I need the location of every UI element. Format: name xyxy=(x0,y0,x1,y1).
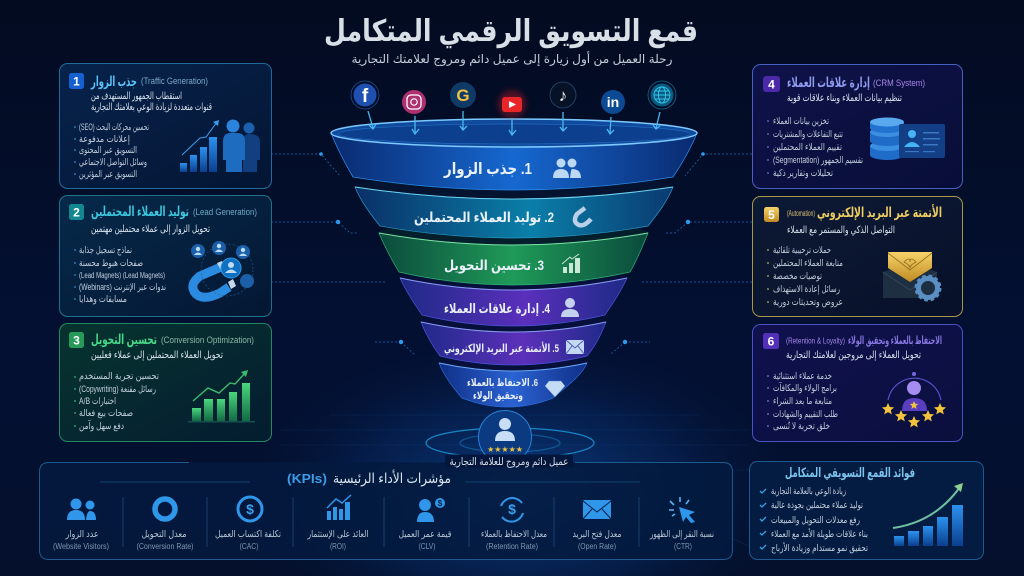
list 6: برامج الولاء والمكافآت xyxy=(773,381,837,394)
kpi: conversion rate xyxy=(136,499,194,551)
icon: diamond xyxy=(545,381,565,397)
icon: globe xyxy=(648,81,676,109)
description 4: تنظيم بيانات العملاء وبناء علاقات قوية xyxy=(787,93,902,104)
list 2: ندوات عبر الإنترنت (Webinars) xyxy=(79,282,166,293)
kpi: customer lifetime value: قيمة عمر العميل xyxy=(398,529,452,540)
label 4: 4. إدارة علاقات العملاء xyxy=(444,301,551,316)
english heading 4: (CRM System) xyxy=(873,78,925,88)
badge caption: عميل دائم ومروج للعلامة التجارية xyxy=(450,456,568,468)
icon: customer with stars xyxy=(882,372,946,427)
kpi: click through rate: نسبة النقر إلى الظهور xyxy=(649,529,714,540)
badge 2: 2 xyxy=(73,206,80,220)
kpi heading: (KPIs) xyxy=(287,471,327,486)
funnel layer 4 xyxy=(400,266,627,326)
list 1: التسويق عبر المؤثرين xyxy=(79,169,137,180)
list 2: نماذج تسجيل جذابة xyxy=(79,245,132,256)
arrows into funnel xyxy=(368,111,660,135)
list 1: التسويق عبر المحتوى xyxy=(79,145,137,156)
heading 5: الأتمتة عبر البريد الإلكتروني xyxy=(817,204,942,220)
kpi: website visitors: عدد الزوار xyxy=(65,529,98,540)
icon: people xyxy=(553,158,581,178)
label 5: 5. الأتمتة عبر البريد الإلكتروني xyxy=(444,341,559,355)
panel: funnel benefits xyxy=(750,462,984,560)
list 5: عروض وتحديثات دورية xyxy=(773,297,843,308)
list 6: متابعة ما بعد الشراء xyxy=(773,396,832,407)
list 2 xyxy=(74,245,166,305)
list 3 xyxy=(74,371,159,432)
kpi: customer lifetime value: (CLV) xyxy=(418,542,436,551)
kpi: customer acquisition cost: (CAC) xyxy=(240,542,259,551)
benefits list xyxy=(760,486,868,554)
panel 4: crm system xyxy=(752,64,962,188)
list 3: رسائل مقنعة (Copywriting) xyxy=(79,384,156,395)
list 5: متابعة العملاء المحتملين xyxy=(773,258,843,269)
english heading 5: (Automation) xyxy=(787,208,815,218)
icon: linkedin: in xyxy=(607,94,619,110)
label 6: 6. الاحتفاظ بالعملاء xyxy=(467,377,538,389)
description 1: استقطاب الجمهور المستهدف من xyxy=(91,91,182,102)
label 6 xyxy=(467,377,538,402)
icon: green bar chart xyxy=(188,370,255,422)
panel 3: conversion optimization xyxy=(60,324,272,442)
label 6: وتحقيق الولاء xyxy=(473,390,523,402)
kpi: conversion rate: (Conversion Rate) xyxy=(136,542,194,551)
list 3: تحسين تجربة المستخدم xyxy=(79,371,159,382)
badge 1: 1 xyxy=(73,74,80,88)
kpi: return on investment: العائد على الإستثمار xyxy=(307,529,368,540)
english heading 6: (Retention & Loyalty) xyxy=(786,336,845,346)
badge 1 xyxy=(69,73,84,89)
panel 2: lead generation xyxy=(60,196,272,316)
icon: google xyxy=(450,82,476,108)
title: قمع التسويق الرقمي المتكامل xyxy=(324,15,698,49)
badge 5 xyxy=(764,207,779,222)
icon: tiktok: ♪ xyxy=(559,86,567,105)
list 6: خدمة عملاء استثنائية xyxy=(773,371,832,382)
description 6: تحويل العملاء إلى مروجين لعلامتك التجارية xyxy=(786,350,921,361)
funnel layer 3 xyxy=(379,221,648,285)
label 2: 2. توليد العملاء المحتملين xyxy=(414,209,554,226)
icon: envelope xyxy=(566,340,584,354)
list 4: تخزين بيانات العملاء xyxy=(773,116,829,127)
heading 4: إدارة علاقات العملاء xyxy=(787,75,870,90)
label 3: 3. تحسين التحويل xyxy=(444,257,544,274)
kpi: click through rate: (CTR) xyxy=(674,542,692,551)
list 6: خلق تجربة لا تُنسى xyxy=(773,421,830,432)
description 1: قنوات متعددة لزيادة الوعي بعلامتك التجارية xyxy=(91,102,212,113)
kpi: retention rate xyxy=(481,498,547,551)
badge 4 xyxy=(763,76,780,92)
list 4: تتبع التفاعلات والمشتريات xyxy=(773,129,843,140)
icon: linkedin xyxy=(601,90,625,114)
list 5: توصيات مخصصة xyxy=(773,271,822,282)
panel 5: email automation xyxy=(752,196,962,316)
benefits chart xyxy=(893,483,963,546)
benefits list: توليد عملاء محتملين بجودة عالية xyxy=(771,500,863,511)
list 1: تحسين محركات البحث (SEO) xyxy=(79,122,149,133)
badge 4: 4 xyxy=(768,78,775,92)
kpi heading xyxy=(287,469,451,487)
badge 3: 3 xyxy=(73,334,80,348)
list 2: (Lead Magnets) (Lead Magnets) xyxy=(79,271,165,280)
icon: google: G xyxy=(456,86,470,105)
icon: youtube xyxy=(498,90,526,118)
kpi: conversion rate: معدل التحويل xyxy=(142,529,186,540)
english heading 3: (Conversion Optimization) xyxy=(161,335,254,345)
list 5: حملات ترحيبية تلقائية xyxy=(773,245,831,256)
kpi: website visitors xyxy=(53,498,109,551)
kpi: retention rate: $ xyxy=(508,501,516,517)
panel 1: traffic generation xyxy=(60,64,272,188)
kpi: customer acquisition cost: $ xyxy=(246,501,254,517)
description 3: تحويل العملاء المحتملين إلى عملاء فعليين xyxy=(91,350,223,361)
icon: magnet xyxy=(575,208,591,225)
funnel layer 6 xyxy=(439,355,587,407)
icon: tiktok xyxy=(550,82,576,108)
description 5: التواصل الذكي والمستمر مع العملاء xyxy=(787,225,895,236)
kpi: open rate: معدل فتح البريد xyxy=(572,529,622,540)
kpi: retention rate: معدل الاحتفاظ بالعملاء xyxy=(481,529,547,540)
description 2: تحويل الزوار إلى عملاء محتملين مهتمين xyxy=(91,224,210,235)
connector lines xyxy=(271,152,752,355)
list 5 xyxy=(767,245,843,308)
rating stars: ★★★★★ xyxy=(487,445,523,454)
kpi: return on investment: (ROI) xyxy=(330,542,346,551)
english heading 1: (Traffic Generation) xyxy=(141,76,208,86)
icon: instagram xyxy=(402,90,426,114)
heading 2: توليد العملاء المحتملين xyxy=(91,204,189,219)
list 3: صفحات بيع فعالة xyxy=(79,408,133,419)
benefits heading: فوائد القمع التسويقي المتكامل xyxy=(785,465,915,480)
kpi heading: مؤشرات الأداء الرئيسية xyxy=(333,469,451,487)
list 6 xyxy=(767,371,838,432)
list 3: اختبارات A/B xyxy=(79,396,116,407)
list 5: رسائل إعادة الاستهداف xyxy=(773,284,840,295)
list 1: وسائل التواصل الاجتماعي xyxy=(79,157,147,168)
social icons xyxy=(351,81,676,135)
benefits list: بناء علاقات طويلة الأمد مع العملاء xyxy=(771,528,868,540)
heading 1: جذب الزوار xyxy=(90,74,137,89)
funnel xyxy=(331,119,697,407)
loyal customer badge xyxy=(426,410,594,468)
english heading 2: (Lead Generation) xyxy=(193,207,257,217)
badge 2 xyxy=(69,204,84,220)
icon: user xyxy=(561,298,579,317)
panel: kpis xyxy=(40,462,732,560)
benefits list: تحقيق نمو مستدام وزيادة الأرباح xyxy=(771,542,868,554)
kpi: click through rate xyxy=(649,497,714,551)
kpi: open rate: (Open Rate) xyxy=(578,542,616,551)
label 1: 1. جذب الزوار xyxy=(443,161,532,178)
benefits list: رفع معدلات التحويل والمبيعات xyxy=(771,515,860,526)
heading 3: تحسين التحويل xyxy=(91,332,157,347)
subtitle: رحلة العميل من أول زيارة إلى عميل دائم ومروج لعلامتك التجارية xyxy=(352,51,673,67)
list 2: صفحات هبوط محسنة xyxy=(79,258,143,269)
icon: golden envelope and gear xyxy=(883,252,940,300)
kpi: customer acquisition cost: تكلفة اكتساب العميل xyxy=(215,529,281,540)
kpi: return on investment xyxy=(307,495,368,551)
kpi: retention rate: (Retention Rate) xyxy=(486,542,538,551)
list 1: إعلانات مدفوعة xyxy=(79,134,130,145)
panel 6: retention and loyalty xyxy=(752,324,962,442)
badge 3 xyxy=(69,332,84,348)
icon: magnet attracting people xyxy=(191,241,254,297)
badge 5: 5 xyxy=(768,208,775,222)
kpi: website visitors: (Website Visitors) xyxy=(53,542,109,551)
icon: facebook: f xyxy=(362,86,369,107)
list 2: مسابقات وهدايا xyxy=(79,294,127,305)
heading 6: الاحتفاظ بالعملاء وتحقيق الولاء xyxy=(848,335,942,347)
kpi: customer lifetime value: $ xyxy=(438,499,443,508)
funnel layer 2 xyxy=(355,175,673,238)
list 4 xyxy=(767,116,863,179)
badge 6 xyxy=(763,333,779,349)
funnel layer 5 xyxy=(421,312,606,365)
kpi: customer lifetime value xyxy=(398,498,452,551)
icon: customer xyxy=(495,418,515,441)
list 4: تحليلات وتقارير ذكية xyxy=(773,168,833,179)
kpi: customer acquisition cost xyxy=(215,497,281,551)
kpi: open rate xyxy=(572,500,622,551)
icon: database and contact card xyxy=(870,118,945,160)
description 1 xyxy=(91,91,212,113)
icon: chart xyxy=(562,254,580,273)
list 4: تقييم العملاء المحتملين xyxy=(773,142,842,153)
badge 6: 6 xyxy=(768,334,775,348)
list 6: طلب التقييم والشهادات xyxy=(773,409,838,420)
icon: growth chart and people xyxy=(180,120,260,172)
icon: facebook xyxy=(351,81,379,109)
benefits list: زيادة الوعي بالعلامة التجارية xyxy=(771,486,846,497)
list 3: دفع سهل وآمن xyxy=(79,419,124,432)
list 1 xyxy=(74,122,149,180)
funnel layer 1 xyxy=(331,119,697,190)
list 4: تقسيم الجمهور (Segmentation) xyxy=(773,155,863,166)
